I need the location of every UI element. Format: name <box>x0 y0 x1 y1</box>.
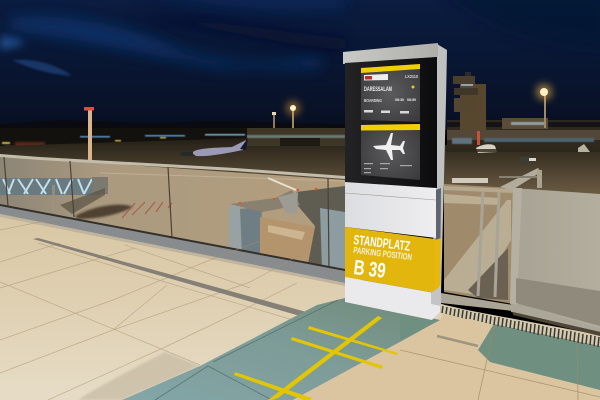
beige shadow band on floor <box>78 352 200 400</box>
flight information screen: 08:30 <box>395 97 405 102</box>
light mast left <box>84 107 94 165</box>
digital signage kiosk <box>343 43 447 320</box>
teal shadow on floor <box>122 298 440 400</box>
sign label: Parking position: PARKING POSITION <box>353 245 413 262</box>
background: night sky <box>0 0 600 130</box>
balustrade curb <box>0 204 345 286</box>
right glass panel <box>510 188 600 336</box>
kiosk top cap <box>343 43 438 64</box>
kiosk side dark edge <box>435 188 441 292</box>
kiosk side strip <box>432 44 447 318</box>
teal shadow right of kiosk <box>400 317 600 400</box>
roof terrace floor <box>0 205 600 400</box>
passenger boarding bridge centre <box>229 186 345 278</box>
floor tile grid <box>0 218 578 400</box>
terminal building and control tower right <box>447 72 600 150</box>
sunlit floor right of kiosk <box>293 310 600 400</box>
distant hills and lights <box>0 120 345 148</box>
apron markings and shadow behind glass <box>75 173 345 219</box>
kiosk white middle section <box>345 182 436 238</box>
flight information screen: DARESSALAM <box>364 86 392 93</box>
glass balustrade top rail and posts <box>0 154 345 270</box>
glass balustrade background area <box>0 156 345 275</box>
aircraft position screen <box>361 124 420 180</box>
apron tarmac <box>0 138 600 196</box>
long shadow across floor <box>33 238 310 318</box>
terminal building left <box>247 128 345 146</box>
aircraft and vehicles at terminal right <box>446 131 600 163</box>
kiosk yellow band <box>345 227 435 293</box>
railing section behind kiosk right <box>441 168 542 311</box>
kiosk white base <box>345 277 440 320</box>
flight information screen: 08:50 <box>407 97 417 102</box>
parked airplane <box>181 138 248 156</box>
flight information screen: BOARDING <box>364 98 382 103</box>
drainage grate <box>440 305 600 347</box>
yellow floor markings <box>234 316 398 400</box>
light masts centre <box>272 101 300 128</box>
flight information screen: LX2110 <box>405 74 418 79</box>
flight information screen <box>361 64 420 122</box>
kiosk black display housing <box>345 57 437 188</box>
sign label: Standplatz: STANDPLATZ <box>353 232 411 254</box>
icon: airplane <box>373 133 405 160</box>
passenger boarding bridge left <box>0 177 108 214</box>
sign label: B 39: B 39 <box>352 256 387 283</box>
kiosk yellow side <box>435 238 441 293</box>
